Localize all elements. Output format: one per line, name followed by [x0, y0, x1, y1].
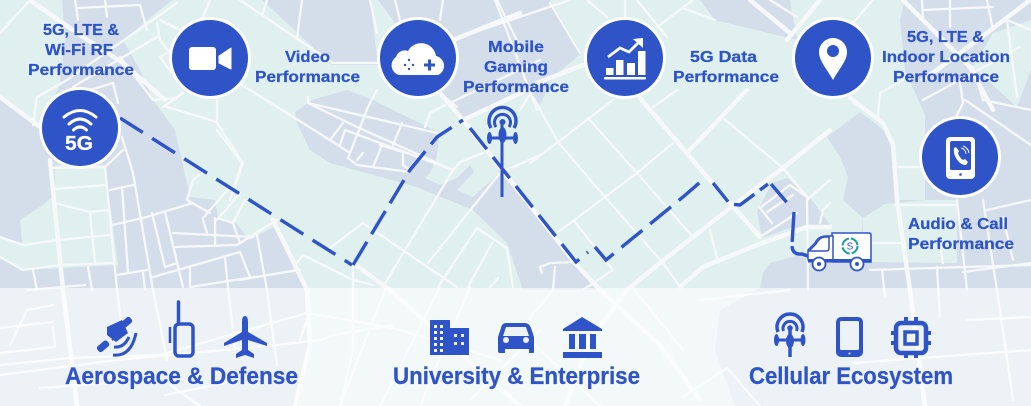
- icon: 5G circle: [39, 87, 121, 169]
- heading: University & Enterprise: University & Enterprise: [393, 363, 640, 390]
- icon: 5G circle: 5G: [65, 133, 93, 155]
- heading: Audio & Call Performance: Audio & Call: [908, 216, 1008, 233]
- heading: Video Performance: [255, 49, 360, 86]
- right grid: [878, 0, 1031, 123]
- heading: Mobile Gaming Performance: [463, 39, 569, 96]
- heading: Audio & Call Performance: [908, 216, 1014, 253]
- heading: Mobile Gaming Performance: Performance: [463, 79, 569, 96]
- heading: Mobile Gaming Performance: Gaming: [484, 59, 548, 76]
- heading: 5G LTE Wi-Fi RF Performance: Wi-Fi RF: [45, 42, 113, 59]
- icon: tablet: [836, 317, 863, 357]
- icon: walkie-talkie: [170, 302, 193, 356]
- heading: 5G LTE Indoor Location Performance: [882, 29, 1010, 86]
- icon: airplane: [224, 316, 267, 358]
- island streets: [242, 85, 410, 172]
- heading: 5G Data Performance: Performance: [673, 69, 779, 86]
- heading: 5G Data Performance: 5G Data: [690, 49, 757, 66]
- icon: location pin circle: [792, 17, 874, 99]
- light green inlets: [0, 20, 1031, 270]
- heading: 5G LTE Indoor Location Performance: Indoor Location: [882, 49, 1010, 66]
- heading: 5G LTE Wi-Fi RF Performance: 5G, LTE &: [43, 22, 119, 39]
- centre grid: [530, 90, 808, 290]
- icon: office building: [430, 320, 469, 355]
- dashed drive route: [120, 118, 808, 265]
- icon: video circle: [169, 17, 251, 99]
- heading: 5G LTE Indoor Location Performance: 5G, LTE &: [907, 29, 984, 46]
- icon: test van: S: [847, 242, 854, 252]
- heading: 5G LTE Wi-Fi RF Performance: [28, 22, 134, 79]
- icon: antenna: [774, 314, 806, 357]
- icon: institution bank: [563, 317, 602, 358]
- heading: Cellular Ecosystem: Cellular Ecosystem: [749, 363, 953, 390]
- icon: mobile gaming cloud circle: [377, 17, 459, 99]
- bottom translucent band: [0, 288, 1031, 406]
- heading: 5G Data Performance: [673, 49, 779, 86]
- icon: cell tower: [487, 107, 518, 197]
- heading: Video Performance: Video: [285, 49, 330, 66]
- icon: 5G data chart circle: [584, 17, 666, 99]
- heading: Video Performance: Performance: [255, 69, 360, 86]
- icon: car: [498, 323, 534, 353]
- heading: Mobile Gaming Performance: Mobile: [488, 39, 544, 56]
- lower band streets: [0, 285, 500, 406]
- left grid: [0, 0, 147, 33]
- heading: Aerospace & Defense: Aerospace & Defense: [65, 363, 298, 390]
- icon: test van: [808, 233, 871, 270]
- heading: 5G LTE Indoor Location Performance: Performance: [893, 69, 999, 86]
- heading: Audio & Call Performance: Performance: [908, 236, 1014, 253]
- icon: satellite: [96, 316, 136, 355]
- icon: chip: [891, 317, 931, 358]
- icon: audio call phone circle: [919, 116, 1001, 198]
- heading: 5G LTE Wi-Fi RF Performance: Performance: [28, 62, 134, 79]
- top centre: [163, 0, 873, 200]
